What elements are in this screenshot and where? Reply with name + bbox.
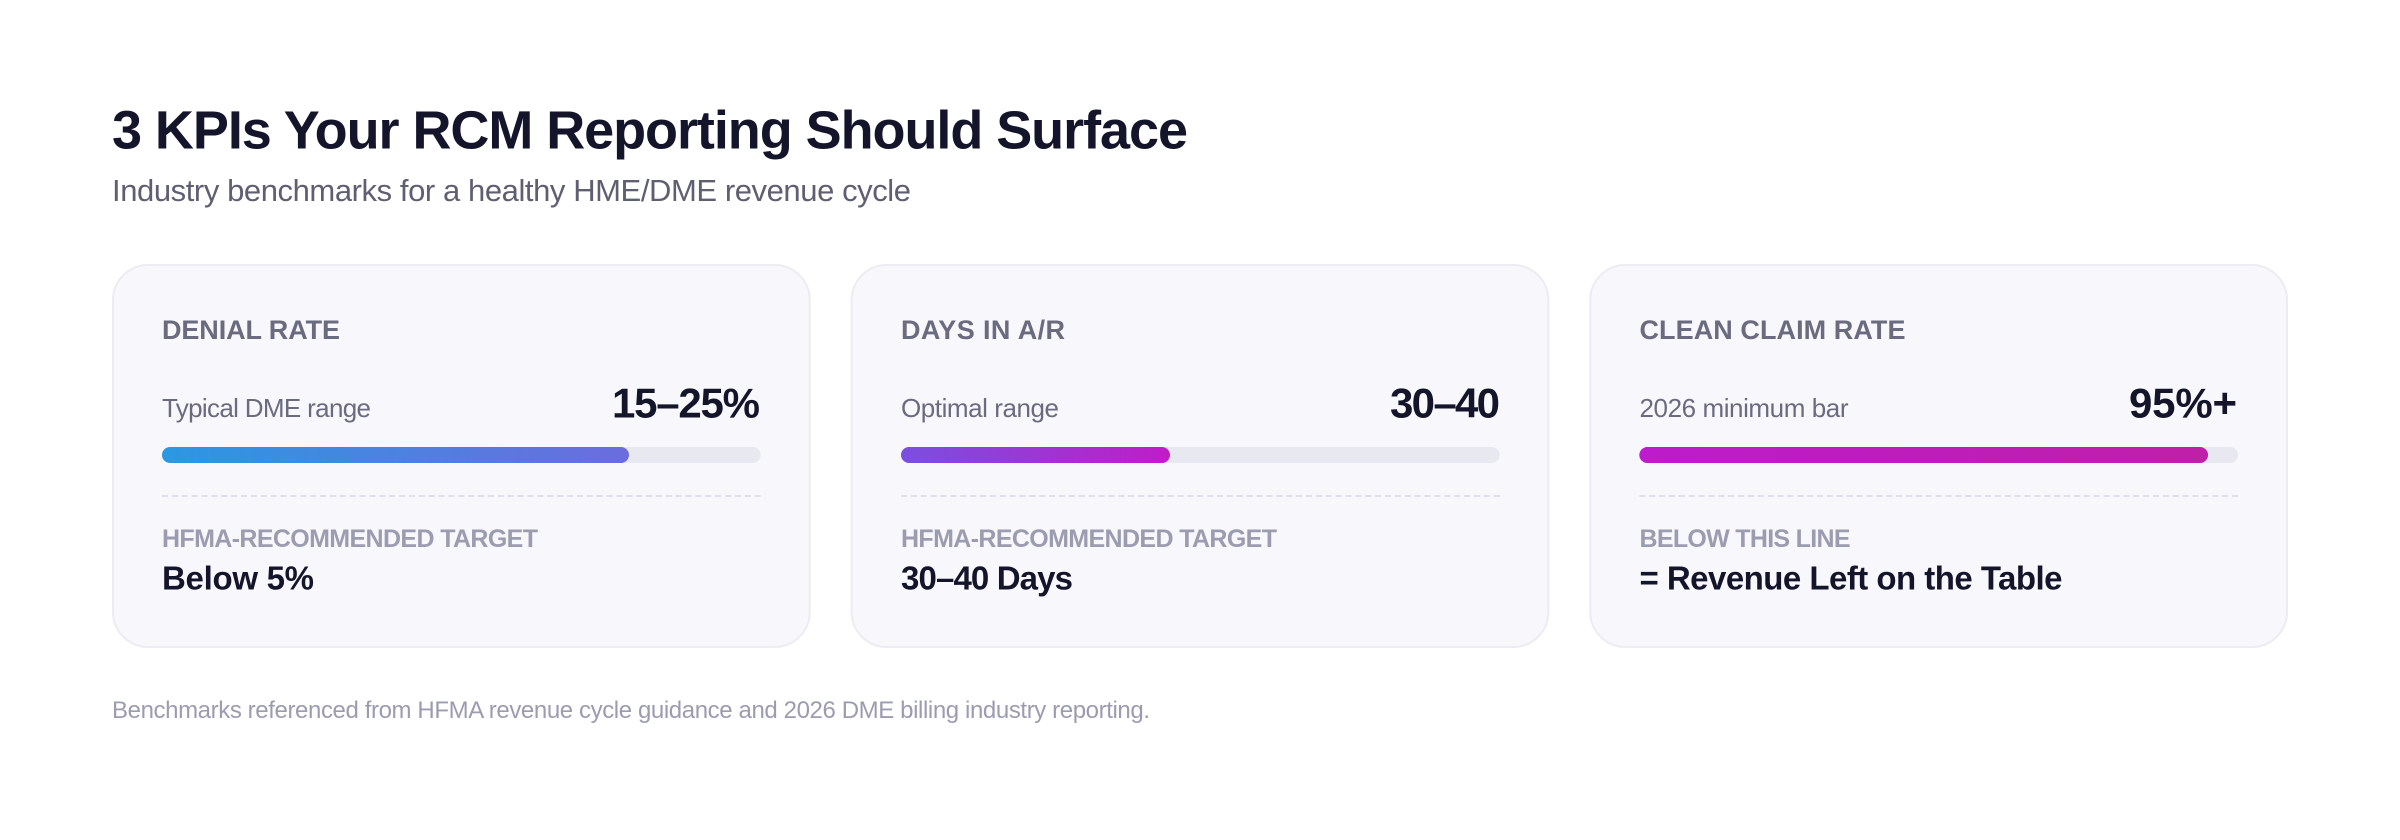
target value: = Revenue Left on the Table — [1640, 560, 2062, 596]
heading: clean claim rate: CLEAN CLAIM RATE — [1640, 315, 1906, 345]
panel: clean claim rate — [1590, 265, 2287, 647]
target label: BELOW THIS LINE — [1640, 525, 1850, 553]
value: 95%+: 95%+ — [2129, 380, 2237, 426]
title: 3 KPIs Your RCM Reporting Should Surface — [112, 100, 1188, 160]
target value: 30–40 Days — [901, 560, 1073, 596]
heading: denial rate: DENIAL RATE — [162, 315, 340, 345]
progress bar: clean claim rate — [1639, 447, 2238, 463]
value: 15–25%: 15–25% — [612, 380, 760, 426]
target label: HFMA-RECOMMENDED TARGET — [901, 525, 1277, 553]
subtitle: Industry benchmarks for a healthy HME/DME revenue cycle — [112, 173, 911, 208]
footnote: Benchmarks referenced from HFMA revenue cycle guidance and 2026 DME billing industry reporting. — [112, 697, 1150, 724]
label: typical DME range: Typical DME range — [162, 393, 371, 423]
panel: denial rate — [113, 265, 810, 647]
value: 30–40: 30–40 — [1390, 380, 1500, 426]
target value: Below 5% — [162, 560, 314, 596]
progress bar: denial rate — [162, 447, 761, 463]
label: 2026 minimum bar: 2026 minimum bar — [1640, 393, 1849, 423]
progress bar: days in A/R — [901, 447, 1500, 463]
target label: HFMA-RECOMMENDED TARGET — [162, 525, 538, 553]
heading: days in A/R: DAYS IN A/R — [901, 315, 1065, 345]
label: optimal range: Optimal range — [901, 393, 1059, 423]
panel: days in A/R — [852, 265, 1548, 647]
